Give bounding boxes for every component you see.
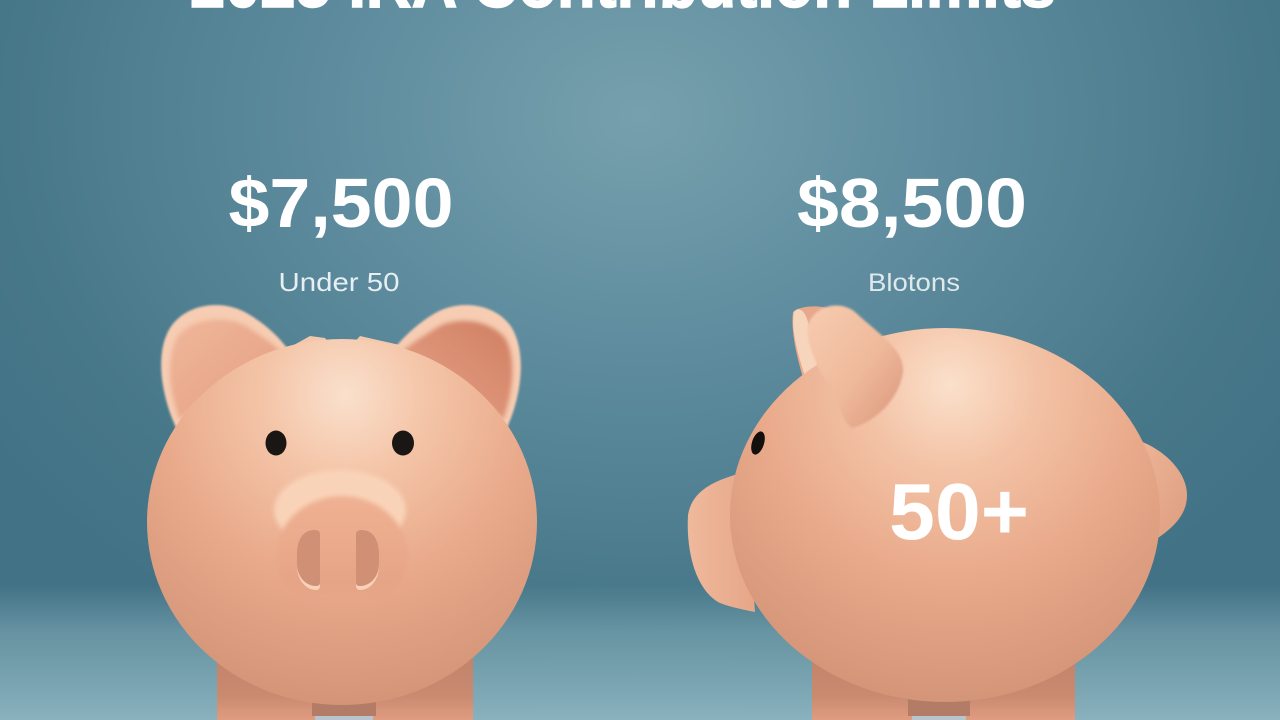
panel: 50 and over [688,164,1187,720]
icon: eye [749,430,767,456]
icon: ear [807,306,903,428]
icon: eyes [266,430,414,456]
label: 50 and over: Blotons [868,269,960,297]
amount: 50 and over: $8,500 [797,164,1027,242]
icon: front-facing piggy bank [147,305,537,720]
icon: side-facing piggy bank [688,306,1187,720]
icon: snout [274,470,408,616]
label: under 50: Under 50 [278,267,400,297]
amount: under 50: $7,500 [228,164,454,242]
badge: 50+: 50+ [889,467,1029,556]
panel: under 50 [147,164,537,720]
